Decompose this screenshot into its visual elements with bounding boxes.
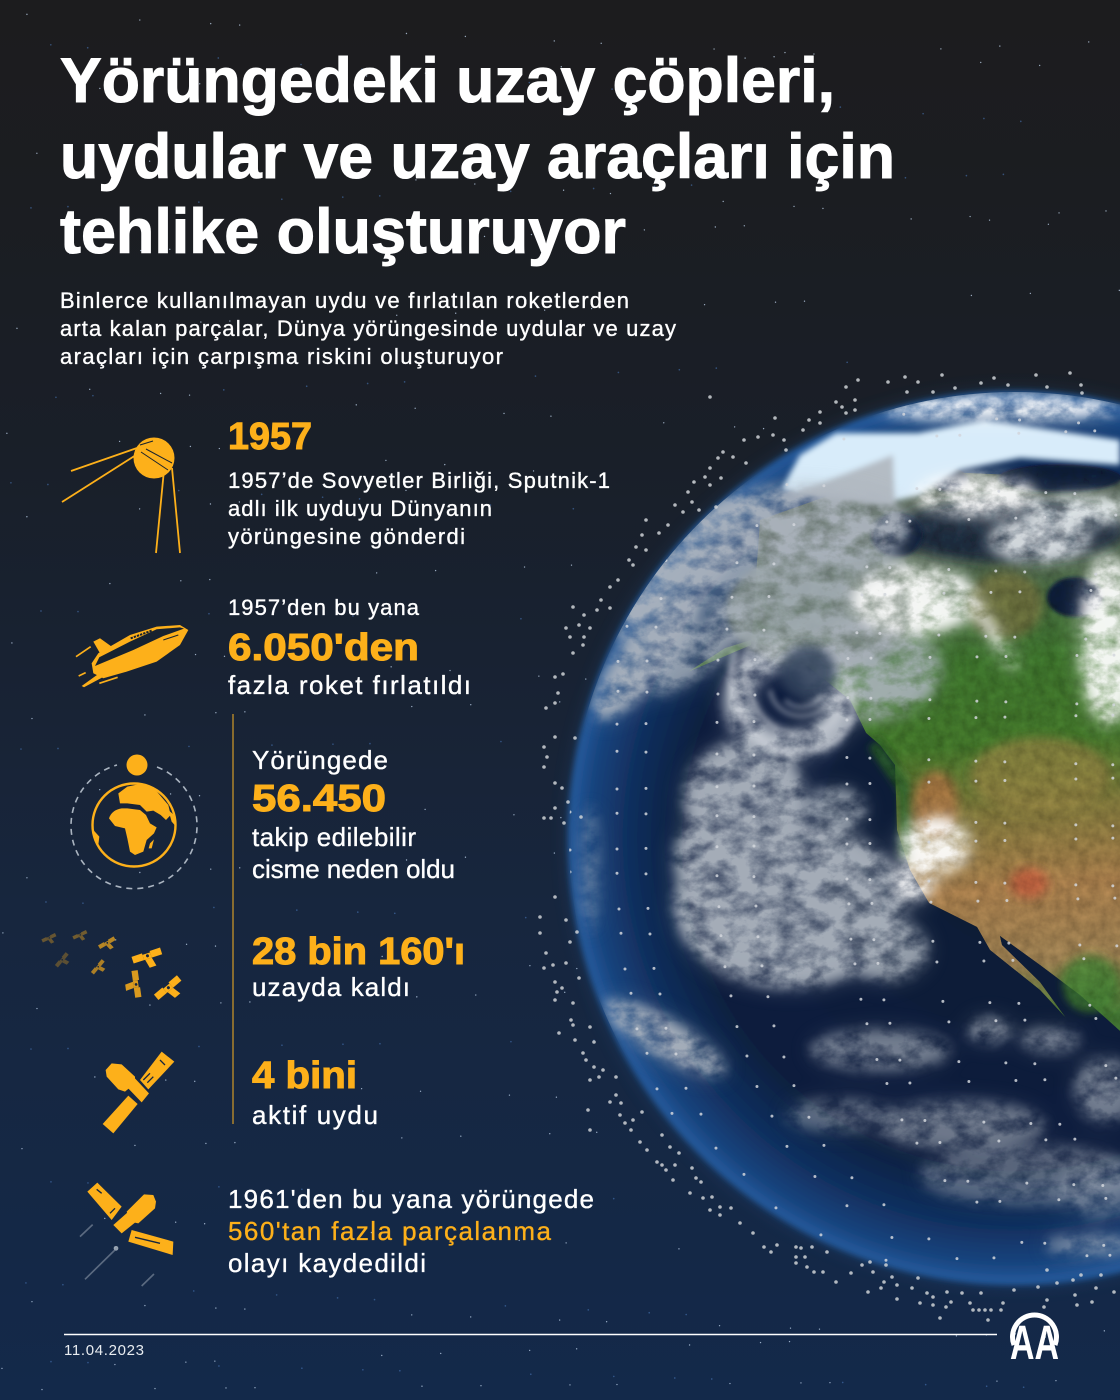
block: fragmentation events [228, 1184, 594, 1278]
block: rockets launched: 6.050'den [228, 627, 419, 669]
block: tracked objects [252, 745, 455, 884]
block: fragmentation events: olayı kaydedildi [228, 1248, 426, 1278]
block: fragmentation events: 560'tan fazla parçalanma [228, 1216, 552, 1246]
cyclone eye [780, 645, 836, 699]
block: active satellites: 4 bini [252, 1055, 357, 1097]
block: tracked objects: cisme neden oldu [252, 854, 455, 884]
footer rule [64, 1334, 997, 1336]
earth [568, 391, 1120, 1285]
logo: AA [1010, 1315, 1059, 1370]
title: uydular ve uzay araçları için [60, 122, 895, 192]
icon: active satellite [103, 1052, 174, 1133]
title: tehlike oluşturuyor [60, 197, 626, 267]
block: remained in space: 28 bin 160'ı [252, 931, 465, 973]
cyclone swirl [732, 650, 853, 752]
icon: rocket [76, 625, 188, 687]
block: 1957: yörüngesine gönderdi [228, 524, 465, 549]
block: 1957 [228, 416, 610, 549]
block: remained in space: uzayda kaldı [252, 972, 410, 1002]
subtitle: Binlerce kullanılmayan uydu ve fırlatılan roketlerden [60, 288, 629, 313]
subtitle: araçları için çarpışma riskini oluşturuyor [60, 344, 503, 369]
block: active satellites: aktif uydu [252, 1100, 378, 1130]
block: rockets launched: 1957’den bu yana [228, 595, 420, 620]
icon: globe with orbit [71, 754, 197, 889]
subtitle [60, 288, 676, 369]
icon: satellite swarm [41, 930, 187, 1007]
icon: sputnik [62, 438, 180, 553]
atmosphere glow [568, 391, 1120, 1285]
clouds [579, 396, 1120, 1255]
block: tracked objects: takip edilebilir [252, 822, 416, 852]
block: 1957: adlı ilk uyduyu Dünyanın [228, 496, 492, 521]
title: Yörüngedeki uzay çöpleri, [60, 46, 835, 116]
land and clouds [570, 396, 1120, 1262]
vertical divider [232, 714, 234, 1124]
icon: fragmenting satellite [80, 1183, 173, 1286]
block: rockets launched [228, 595, 471, 700]
block: fragmentation events: 1961'den bu yana yörüngede [228, 1184, 594, 1214]
title [60, 46, 895, 267]
logo: AA: AA [1010, 1317, 1059, 1370]
dark water on land [871, 464, 1120, 617]
block: tracked objects: Yörüngede [252, 745, 388, 775]
soft cloud base [579, 396, 1120, 1255]
orbital debris field [540, 373, 1114, 1320]
ocean disc [568, 391, 1120, 1285]
block: remained in space [252, 931, 465, 1002]
block: tracked objects: 56.450 [252, 778, 386, 820]
debris over earth [570, 405, 1120, 1262]
arctic ice [781, 420, 1120, 507]
subtitle: arta kalan parçalar, Dünya yörüngesinde uydular ve uzay [60, 316, 676, 341]
block: rockets launched: fazla roket fırlatıldı [228, 670, 471, 700]
block: 1957: 1957’de Sovyetler Birliği, Sputnik-1 [228, 468, 610, 493]
block: 1957: 1957 [228, 416, 312, 458]
north america land [688, 464, 1120, 1040]
block: active satellites [252, 1055, 378, 1130]
date: 11.04.2023 [64, 1342, 144, 1359]
